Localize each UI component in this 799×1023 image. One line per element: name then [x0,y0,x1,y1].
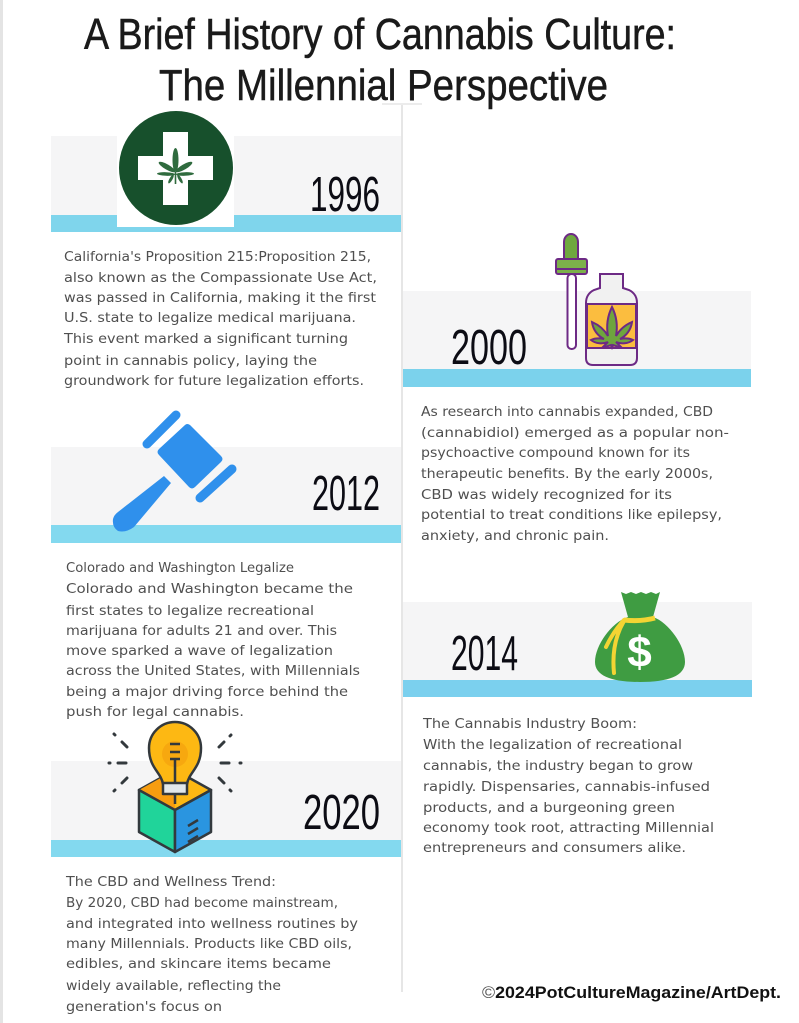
text: 2020 description: generation's focus on [66,999,222,1015]
text: 1996 description: This event marked a significant turning [63,331,348,347]
text: 1996 description: groundwork for future legalization efforts. [64,373,364,389]
text: 2012 description: marijuana for adults 21 and over. This [66,623,337,639]
text: 2000 description: (cannabidiol) emerged as a popular non- [421,425,729,441]
icon: money bag [595,592,685,682]
text: 1996 description: point in cannabis policy, laying the [64,353,317,369]
year: 2014: 2014 [451,627,518,681]
title [84,10,676,110]
year: 1996: 1996 [310,168,380,222]
text: 2014 description: economy took root, attracting Millennial [423,820,714,836]
title: A Brief History of Cannabis Culture: [84,10,676,59]
text: 2000 description [421,404,729,544]
text: 2012 description: move sparked a wave of legalization [66,643,333,659]
icon: money bag: $ [627,628,652,677]
panel: 1996 [51,111,401,389]
text: 2020 description [65,874,358,1015]
text: 2014 description: The Cannabis Industry Boom: [422,716,637,732]
text: 1996 description: was passed in California, making it the first [64,290,376,306]
icon: gavel [113,415,232,532]
text: 1996 description: U.S. state to legalize medical marijuana. [64,310,356,326]
text: 2014 description: entrepreneurs and consumers alike. [423,840,686,856]
text: 2012 description: across the United States, with Millennials [66,663,360,679]
text: 2020 description: many Millennials. Products like CBD oils, [66,936,352,952]
icon: medical cannabis cross [119,111,233,225]
text: 2014 description: With the legalization of recreational [423,737,682,753]
text: 2000 description: therapeutic benefits. By the early 2000s, [421,466,713,482]
text: 2000 description: CBD was widely recognized for its [421,487,672,503]
text: 2000 description: potential to treat conditions like epilepsy, [421,507,722,523]
text: 1996 description: also known as the Compassionate Use Act, [64,270,377,286]
copyright credit: ©2024PotCultureMagazine/ArtDept. [482,984,781,1002]
icon: light bulb in box [109,722,241,852]
text: 1996 description: California's Proposition 215:Proposition 215, [64,249,371,265]
text: 2014 description: products, and a burgeoning green [423,800,675,816]
text: 2000 description: anxiety, and chronic pain. [421,528,609,544]
text: 2020 description: The CBD and Wellness Trend: [65,874,276,890]
text: 2014 description: cannabis, the industry began to grow [423,758,693,774]
year: 2000: 2000 [451,321,527,375]
text: 2012 description: push for legal cannabis. [66,704,244,720]
panel: 2000 [403,234,751,544]
text: 2000 description: As research into cannabis expanded, CBD [421,404,713,420]
text: 2014 description [422,716,714,856]
text: 1996 description [63,249,377,389]
year: 2012: 2012 [312,467,380,521]
panel: 2014 [403,592,752,856]
text: 2012 description [66,560,360,720]
panel: 2012 [51,415,401,720]
text: 2020 description: widely available, reflecting the [66,978,281,994]
icon: CBD dropper and bottle [556,234,637,365]
title: The Millennial Perspective [159,61,608,110]
text: 2012 description: being a major driving force behind the [66,684,348,700]
text: 2012 description: first states to legalize recreational [66,603,314,619]
text: 2012 description: Colorado and Washington Legalize [66,560,294,576]
year: 2020: 2020 [303,786,380,840]
text: 2012 description: Colorado and Washington became the [66,581,353,597]
text: 2020 description: By 2020, CBD had become mainstream, [66,895,338,911]
text: 2014 description: rapidly. Dispensaries, cannabis-infused [423,779,710,795]
text: 2020 description: and integrated into wellness routines by [66,916,358,932]
text: 2020 description: edibles, and skincare items became [66,956,331,972]
panel: 2020 [51,722,401,1015]
text: 2000 description: psychoactive compound known for its [421,445,690,461]
